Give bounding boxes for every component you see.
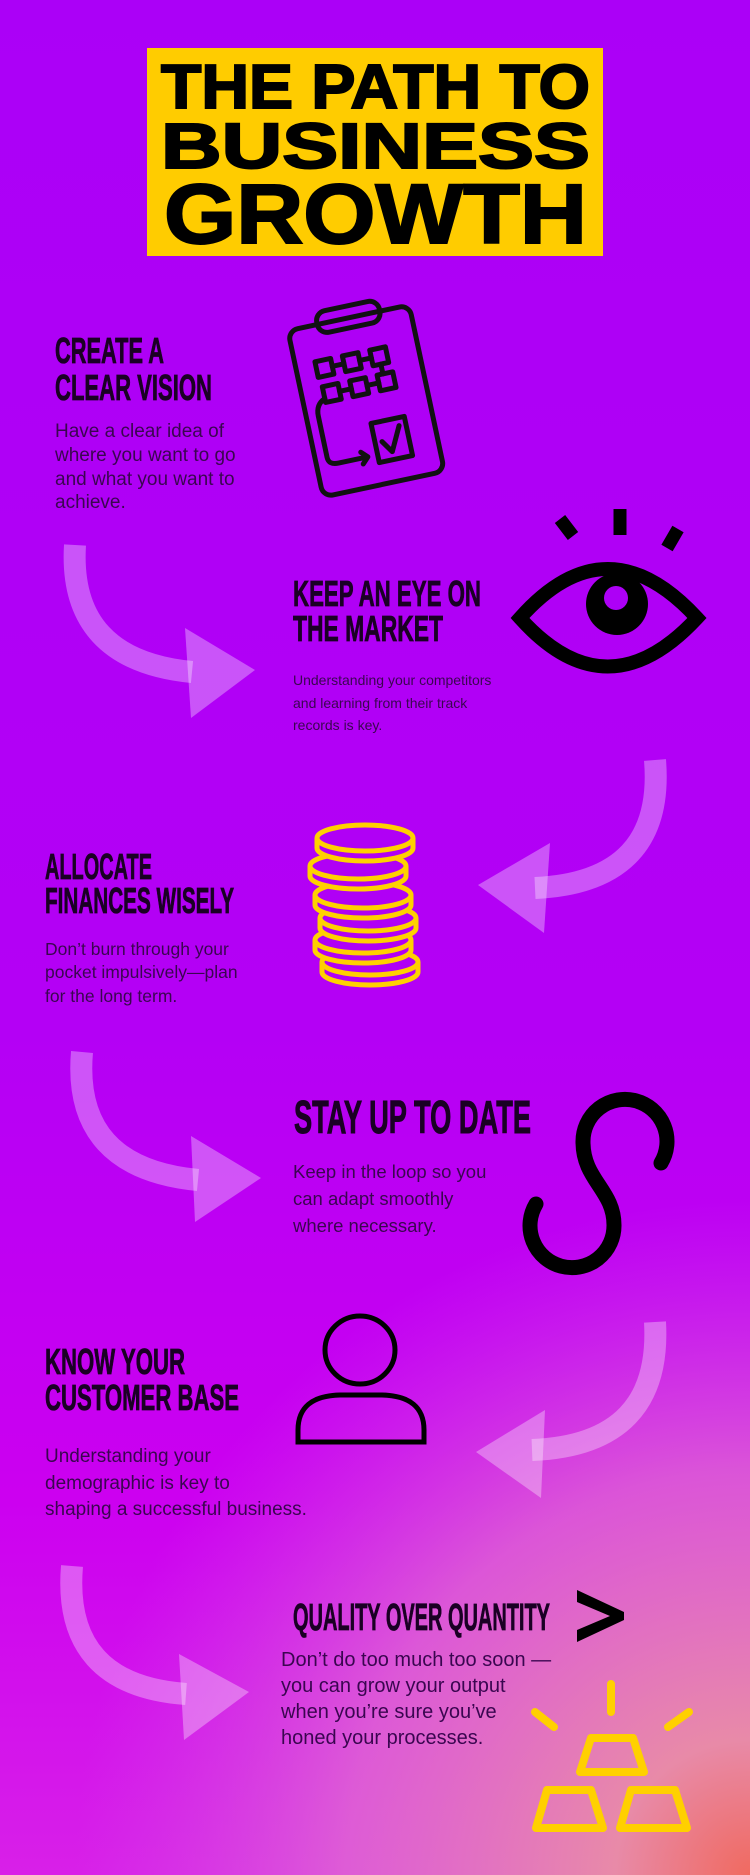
text: keep an eye on the market: and learning from their track	[293, 695, 468, 711]
heading: allocate finances wisely: ALLOCATE	[45, 846, 152, 887]
title: BUSINESS	[161, 110, 590, 182]
text: know your customer base: demographic is key to	[45, 1473, 230, 1494]
text: create a clear vision: and what you want to	[55, 469, 235, 490]
text: create a clear vision: achieve.	[55, 492, 126, 513]
heading: create a clear vision: CREATE A	[55, 330, 164, 371]
heading: keep an eye on the market: THE MARKET	[293, 608, 443, 649]
arrow 2	[478, 760, 656, 933]
text: quality over quantity	[280, 1649, 551, 1749]
arrow 1	[75, 545, 255, 718]
heading: keep an eye on the market: KEEP AN EYE ON	[293, 573, 481, 614]
text: allocate finances wisely: for the long term.	[45, 986, 177, 1006]
text: stay up to date	[292, 1161, 486, 1236]
text: keep an eye on the market: Understanding your competitors	[293, 672, 491, 688]
heading: keep an eye on the market	[293, 573, 481, 649]
heading: allocate finances wisely: FINANCES WISELY	[45, 880, 234, 921]
text: quality over quantity: Don’t do too much too soon —	[281, 1649, 551, 1671]
text: keep an eye on the market	[293, 672, 491, 733]
icon: clipboard	[285, 293, 445, 497]
text: create a clear vision: Have a clear idea of	[55, 421, 225, 442]
heading: know your customer base: KNOW YOUR	[45, 1341, 185, 1382]
text: create a clear vision	[54, 421, 236, 513]
text: allocate finances wisely: pocket impulsively—plan	[45, 962, 238, 982]
text: quality over quantity: you can grow your output	[281, 1675, 506, 1697]
title	[147, 48, 603, 261]
icon: gold bars	[535, 1684, 689, 1828]
text: know your customer base	[45, 1446, 307, 1520]
heading: stay up to date: STAY UP TO DATE	[294, 1091, 531, 1143]
arrow 4	[476, 1322, 655, 1498]
arrow 3	[81, 1052, 261, 1222]
text: know your customer base: Understanding your	[45, 1446, 211, 1467]
arrow 5	[71, 1566, 249, 1740]
text: create a clear vision: where you want to go	[54, 445, 236, 466]
icon: loop	[530, 1099, 667, 1268]
heading: know your customer base: CUSTOMER BASE	[45, 1377, 239, 1418]
heading: allocate finances wisely	[45, 846, 234, 921]
icon: greater-than	[577, 1590, 624, 1642]
text: allocate finances wisely	[45, 939, 238, 1006]
heading: create a clear vision	[55, 330, 212, 408]
icon: coins	[310, 825, 418, 985]
heading: know your customer base	[45, 1341, 239, 1418]
heading: create a clear vision: CLEAR VISION	[55, 367, 212, 408]
text: stay up to date: can adapt smoothly	[293, 1188, 454, 1209]
text: quality over quantity: when you’re sure you’ve	[280, 1701, 497, 1723]
title: THE PATH TO	[161, 53, 590, 122]
title: GROWTH	[164, 167, 587, 261]
text: stay up to date: Keep in the loop so you	[293, 1161, 486, 1182]
icon: eye	[520, 509, 697, 666]
text: allocate finances wisely: Don’t burn through your	[45, 939, 229, 959]
icon: person	[298, 1316, 424, 1442]
text: stay up to date: where necessary.	[292, 1215, 437, 1236]
text: keep an eye on the market: records is key.	[293, 717, 382, 733]
text: quality over quantity: honed your processes.	[281, 1727, 483, 1749]
text: know your customer base: shaping a successful business.	[45, 1499, 307, 1520]
